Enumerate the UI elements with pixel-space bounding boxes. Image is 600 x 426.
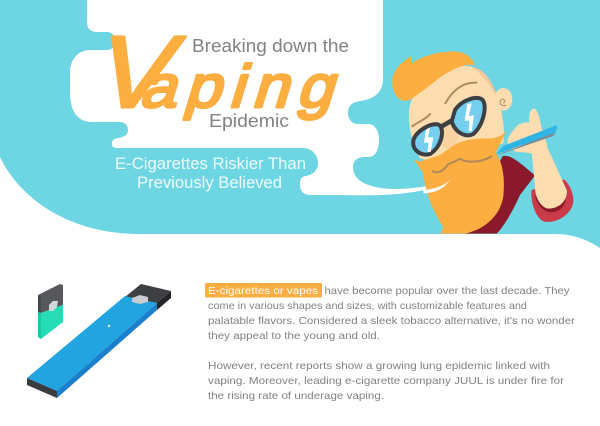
body paragraph 1: they appeal to the young and old. xyxy=(208,331,380,342)
eyebrows xyxy=(412,83,477,127)
led xyxy=(108,325,110,327)
subtitle: Previously Believed xyxy=(137,174,282,192)
vape device illustration xyxy=(27,284,171,398)
highlight box xyxy=(205,283,322,298)
title: Breaking down the: Breaking down the xyxy=(192,35,349,56)
device end xyxy=(27,378,57,398)
body paragraph 1: E-cigarettes or vapes xyxy=(208,286,318,297)
ear xyxy=(494,88,512,111)
white smoke cloud xyxy=(70,0,450,195)
body paragraph 2 xyxy=(208,361,565,402)
glasses xyxy=(452,98,485,135)
connector xyxy=(132,295,148,304)
hair xyxy=(392,52,475,101)
body paragraph 1: palatable flavors. Considered a sleek tobacco alternative, it's no wonder xyxy=(208,316,576,327)
head xyxy=(409,66,504,163)
vape device xyxy=(497,125,557,154)
body paragraph 1 xyxy=(208,286,576,342)
sleeve cuff xyxy=(531,179,573,222)
title: Epidemic: Epidemic xyxy=(209,111,289,131)
glasses glints xyxy=(424,103,474,152)
subtitle: E-Cigarettes Riskier Than xyxy=(115,155,306,173)
beard xyxy=(414,131,506,234)
device body top xyxy=(27,296,157,391)
body paragraph 2: the rising rate of underage vaping. xyxy=(208,391,384,402)
nose xyxy=(439,126,459,149)
body paragraph 2: However, recent reports show a growing lung epidemic linked with xyxy=(208,361,550,372)
body paragraph 2: vaping. Moreover, leading e-cigarette company JUUL is under fire for xyxy=(208,376,565,387)
shirt xyxy=(463,156,535,234)
arm and hand xyxy=(532,140,567,209)
illustration: bearded man vaping xyxy=(392,52,573,234)
moustache line xyxy=(432,156,492,172)
title: Vaping: Vaping xyxy=(84,15,368,129)
smoke tail highlight xyxy=(423,179,450,193)
device body side xyxy=(57,303,157,398)
body paragraph 1: have become popular over the last decade. They xyxy=(324,286,571,297)
pod xyxy=(38,284,63,313)
subtitle xyxy=(115,155,306,192)
body paragraph 1: come in various shapes and sizes, with customizable features and xyxy=(208,301,527,312)
teal header background xyxy=(0,0,600,248)
device top end xyxy=(125,284,171,303)
